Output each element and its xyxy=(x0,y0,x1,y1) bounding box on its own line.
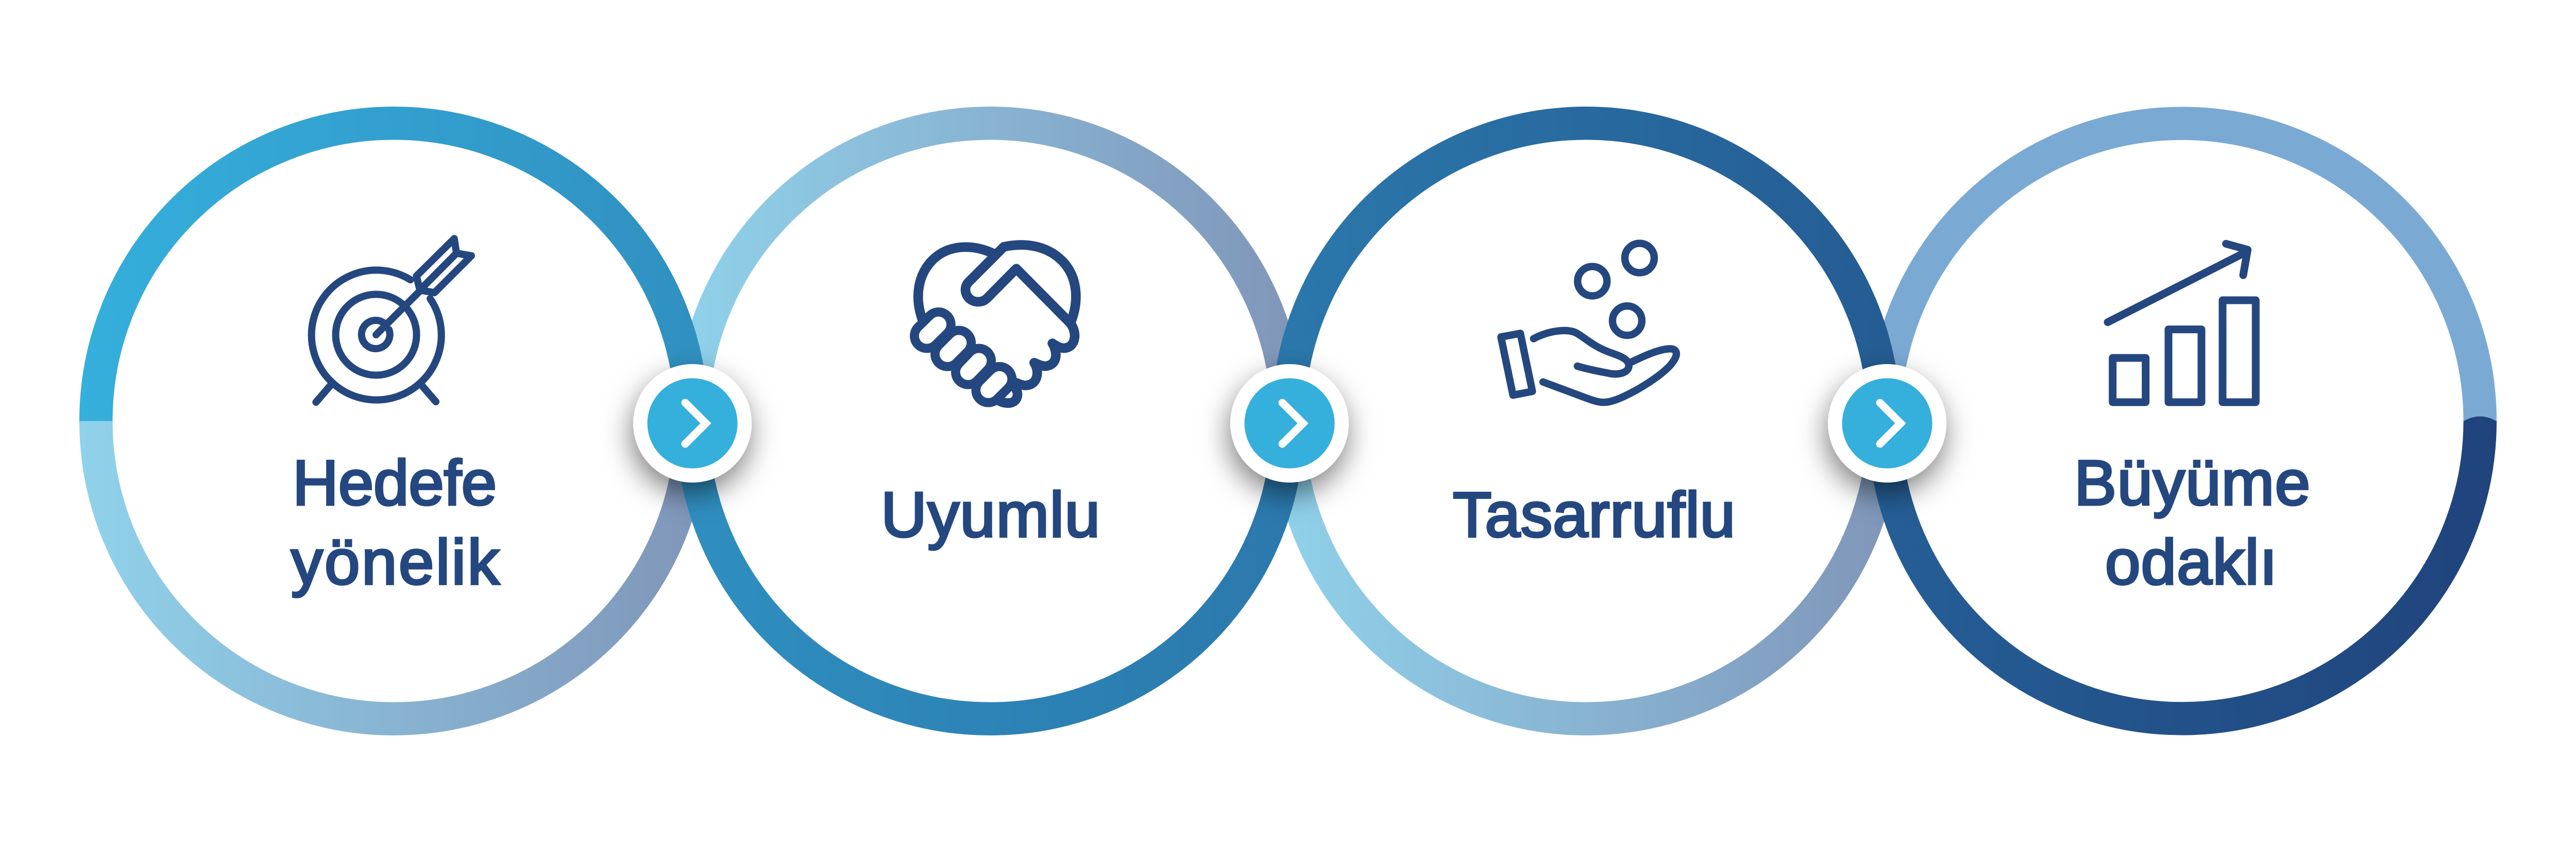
step 1: Hedefe yönelik xyxy=(291,238,500,598)
arrow button 2 xyxy=(1230,364,1349,483)
step 2: Uyumlu xyxy=(881,245,1100,551)
rings xyxy=(96,123,2497,719)
ring 1 upper arc xyxy=(96,123,692,421)
ring 2 upper arc xyxy=(692,123,1288,421)
icon: target with arrow xyxy=(312,238,471,402)
label: Uyumlu: Uyumlu xyxy=(881,480,1100,551)
label: Tasarruflu: Tasarruflu xyxy=(1453,480,1735,551)
arrow button 1 xyxy=(633,364,752,483)
step 4: Büyüme odaklı xyxy=(2074,244,2310,598)
label: Hedefe yönelik xyxy=(291,448,500,598)
ring 3 upper arc xyxy=(1288,123,1884,421)
icon: handshake heart xyxy=(918,245,1076,403)
label: Hedefe yönelik: Hedefe xyxy=(293,448,497,519)
step 3: Tasarruflu xyxy=(1453,243,1735,551)
ring 2 lower arc xyxy=(692,421,1288,719)
ring 3 lower arc xyxy=(1288,421,1884,719)
ring 4 lower arc xyxy=(1884,416,2497,718)
label: Büyüme odaklı xyxy=(2074,448,2310,598)
icon: rising bar chart with arrow xyxy=(2108,244,2256,402)
arrow button 3 xyxy=(1828,364,1946,483)
ring 4 upper arc xyxy=(1884,124,2480,421)
label: Büyüme odaklı: odaklı xyxy=(2105,527,2277,598)
icon: hand with coins xyxy=(1501,243,1676,402)
label: Hedefe yönelik: yönelik xyxy=(291,527,500,598)
label: Büyüme odaklı: Büyüme xyxy=(2074,448,2310,519)
ring 1 lower arc xyxy=(96,421,692,719)
